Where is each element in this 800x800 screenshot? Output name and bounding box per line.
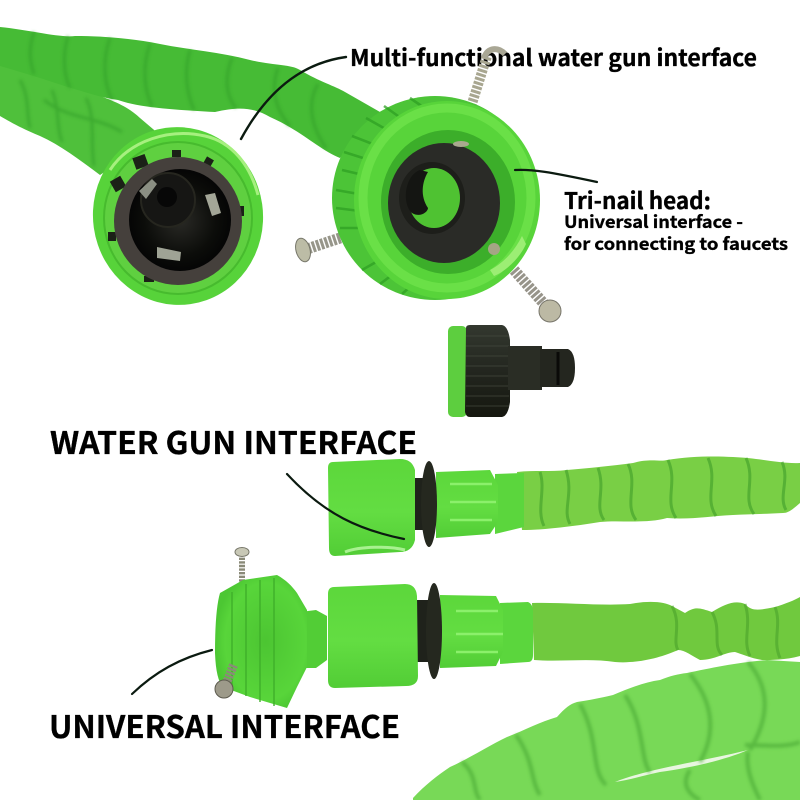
seal shadow rim <box>399 162 465 234</box>
dark grey inner collar <box>114 157 242 285</box>
collar ribs <box>456 611 503 652</box>
upper hose fabric <box>0 27 380 158</box>
cap ribs <box>336 98 436 294</box>
green threaded disc <box>448 326 467 417</box>
green connector cylinder <box>328 584 418 688</box>
hose wrinkles <box>540 458 786 526</box>
cap front face <box>354 101 540 299</box>
black ribbed nut <box>465 325 510 417</box>
black neck <box>508 346 542 390</box>
gap between coils <box>615 750 748 782</box>
hose wrinkles <box>672 604 780 658</box>
lower right reflection <box>490 236 526 276</box>
black rubber seal <box>388 143 500 263</box>
heading: water gun interface: WATER GUN INTERFACE <box>50 418 417 463</box>
highlight on top of ring <box>110 134 258 195</box>
label: tri-nail head description <box>564 182 788 255</box>
plastic taper sleeve <box>500 602 533 664</box>
photo: hose end with water gun connector <box>328 456 800 556</box>
cap ribbed body <box>332 96 538 300</box>
bottom screw <box>215 664 234 698</box>
green connector cylinder <box>328 459 415 556</box>
hose fabric <box>517 456 800 530</box>
fabric wrinkles <box>20 32 326 166</box>
connector lower highlight <box>345 547 405 552</box>
black bore <box>129 169 231 271</box>
cap ribs <box>232 578 274 706</box>
universal cap body <box>215 575 307 708</box>
leader line: tri-nail head <box>515 170 597 182</box>
connector inner green wall <box>104 142 252 294</box>
leader line: universal interface <box>132 650 212 694</box>
black quick connect tip <box>540 349 575 387</box>
cap inner recess <box>381 130 515 274</box>
black neck <box>416 600 438 662</box>
heading: universal interface: UNIVERSAL INTERFACE <box>49 702 400 747</box>
lower hose fabric running into connector <box>0 60 160 175</box>
leader line: multi-functional water gun <box>241 57 346 139</box>
label line two: for connecting to faucets <box>564 230 788 255</box>
leader line: water gun interface <box>287 474 404 539</box>
photo: coiled hose and multi-functional water gun connector <box>0 27 380 316</box>
cap face rim highlight <box>363 108 531 288</box>
hose fabric <box>413 660 800 800</box>
left screw and spring <box>293 230 364 263</box>
bore inner rim <box>141 173 195 227</box>
label line one: Universal interface - <box>564 208 743 233</box>
metal tabs reflections <box>139 179 157 199</box>
black neck <box>414 478 434 530</box>
universal cap neck <box>300 610 327 668</box>
dark bore shadow <box>406 170 428 215</box>
photo: coiled hose corner, bottom right <box>413 660 800 800</box>
connector outer translucent green ring <box>81 116 275 316</box>
photo: tri-nail head connector <box>293 49 561 322</box>
top screw and spring <box>470 49 505 110</box>
photo: black tap adapter with green disc <box>448 325 575 417</box>
hose fabric <box>532 597 800 662</box>
right screw and spring <box>514 270 561 322</box>
heading: multi-functional water gun interface: Multi-functional water gun interface <box>350 39 757 73</box>
ribbed plastic collar <box>440 595 503 668</box>
water hole <box>157 187 177 207</box>
ribbed plastic collar <box>436 470 498 538</box>
dark clip notches <box>108 150 244 282</box>
small inner screw tips <box>453 141 469 147</box>
tip groove <box>556 352 560 385</box>
photo: hose end with universal interface <box>215 548 800 708</box>
top screw <box>235 548 249 584</box>
nut ribs <box>466 336 509 406</box>
fabric folds <box>462 662 800 800</box>
green bore <box>408 168 460 228</box>
collar ribs <box>450 484 496 520</box>
label title: Tri-nail head: <box>564 182 711 216</box>
plastic taper sleeve <box>495 473 524 534</box>
black washer <box>426 583 442 679</box>
black washer <box>421 461 437 547</box>
